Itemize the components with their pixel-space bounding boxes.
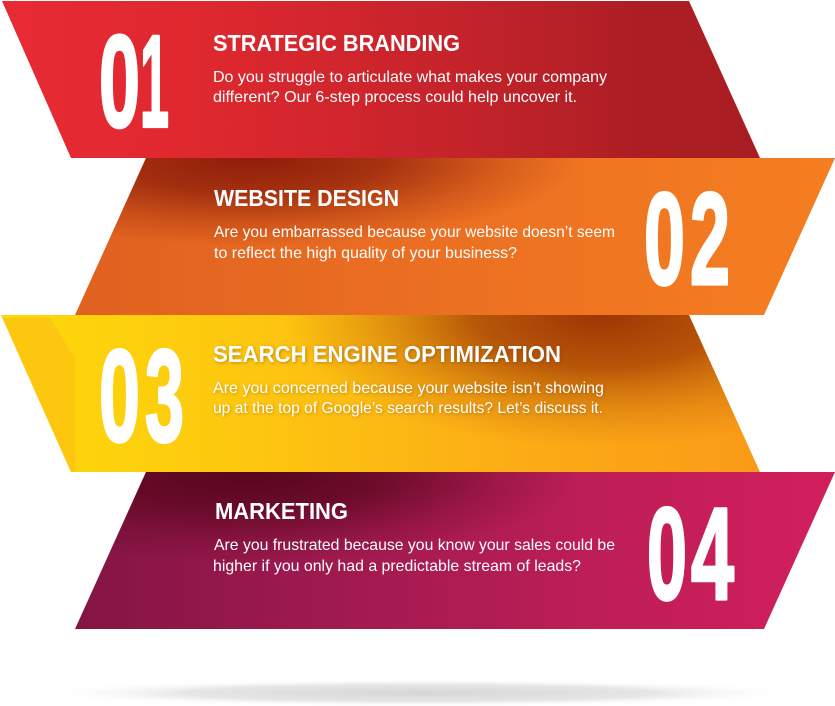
heading: website design: WEBSITE DESIGN [214, 185, 399, 211]
number 03: 0 [99, 322, 140, 469]
number 04 second digit: 4 [691, 480, 734, 627]
band 3 ribbon [1, 315, 760, 472]
number 04: 0 [647, 480, 687, 627]
floor shadow [30, 679, 810, 706]
band 3 left facet [2, 318, 75, 472]
panel: website design [75, 158, 835, 315]
heading: strategic branding: STRATEGIC BRANDING [213, 30, 460, 56]
heading: marketing: MARKETING [215, 498, 348, 524]
band 3 shadow [307, 315, 736, 434]
description 2: Are you embarrassed because your website doesn’t seem [214, 224, 615, 241]
heading: search engine optimization: SEARCH ENGINE OPTIMIZATION [213, 341, 561, 367]
description 1: different? Our 6-step process could help uncover it. [213, 89, 577, 106]
panel: strategic branding: 1 [140, 8, 169, 154]
panel: search engine optimization [1, 315, 760, 472]
band 4 shadow [114, 472, 550, 552]
description 4: higher if you only had a predictable stream of leads? [213, 558, 581, 575]
description 3: up at the top of Google’s search results? Let’s discuss it. [213, 400, 603, 417]
band 2 shadow [114, 158, 554, 238]
description 1 [213, 69, 607, 106]
description 3 [213, 380, 604, 417]
description 4 [213, 537, 615, 575]
description 3: Are you concerned because your website isn’t showing [213, 380, 604, 397]
description 2 [214, 224, 615, 262]
band 4 ribbon [75, 472, 835, 629]
panel: marketing [75, 472, 835, 629]
panel: strategic branding [2, 1, 760, 158]
number 02 second digit: 2 [690, 165, 730, 312]
description 1: Do you struggle to articulate what makes your company [213, 69, 607, 86]
description 2: to reflect the high quality of your business? [214, 245, 517, 262]
description 4: Are you frustrated because you know your sales could be [214, 537, 615, 554]
band 1 ribbon [2, 1, 760, 158]
band 2 ribbon [75, 158, 835, 315]
number 01: 0 [99, 8, 140, 154]
number 03 second digit: 3 [145, 322, 184, 469]
number 02: 0 [644, 165, 685, 312]
